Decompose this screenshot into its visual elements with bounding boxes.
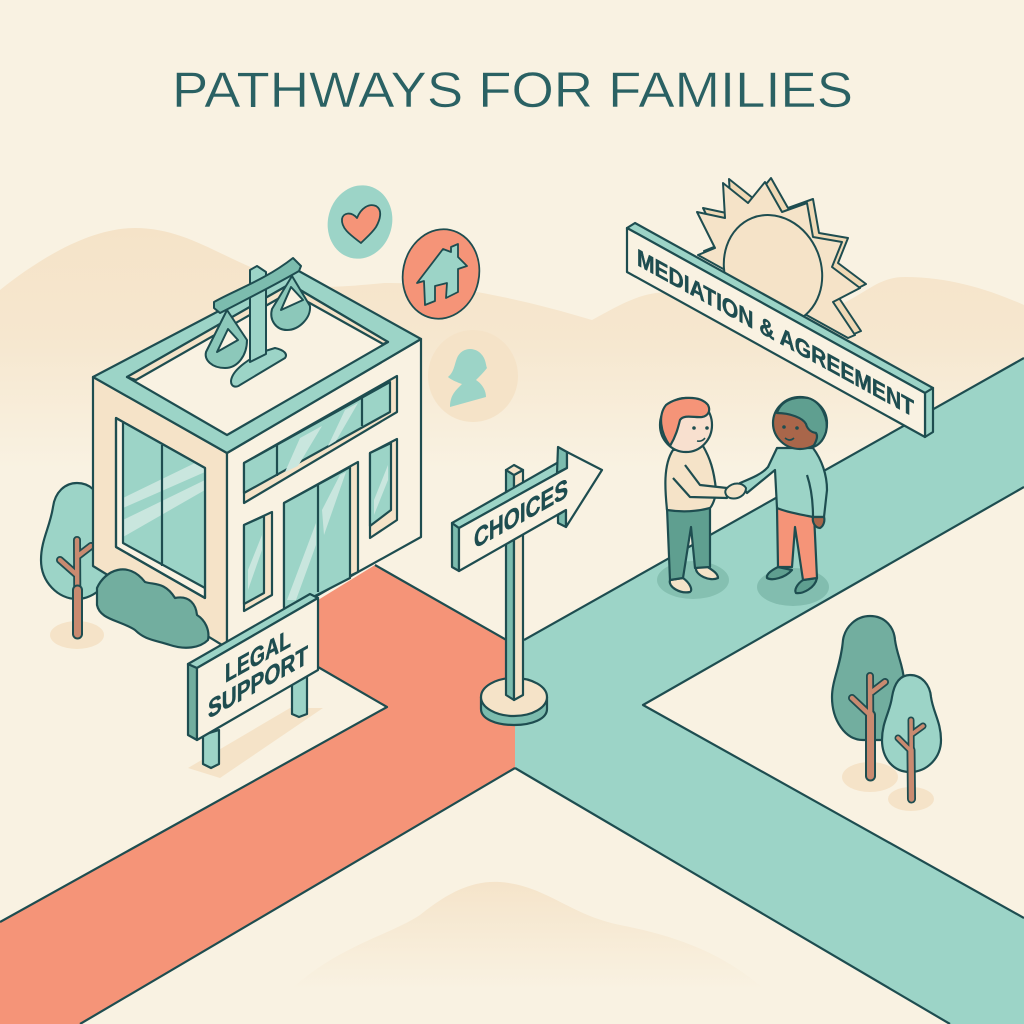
path: red legal route xyxy=(0,565,515,1024)
sign shadow xyxy=(188,708,323,778)
right window xyxy=(370,439,397,538)
roof parapet strip xyxy=(127,284,388,380)
roof interior xyxy=(127,284,388,435)
beam xyxy=(214,258,301,313)
right person pants xyxy=(777,508,817,580)
arrow board xyxy=(452,523,459,571)
roof rim xyxy=(93,270,421,453)
small tree xyxy=(882,675,941,772)
trees: right xyxy=(832,616,941,811)
right person torso xyxy=(740,448,827,517)
handshake xyxy=(725,484,746,498)
shrub xyxy=(97,569,208,648)
sign legs xyxy=(203,675,307,768)
sign text: SUPPORT xyxy=(208,640,308,725)
tree: left xyxy=(41,483,113,649)
entrance door xyxy=(284,462,358,612)
lower-left window xyxy=(244,512,272,611)
title: PATHWAYS FOR FAMILIES xyxy=(172,62,853,118)
floating icon: house xyxy=(394,222,488,326)
right pan xyxy=(271,276,310,330)
sign board xyxy=(188,664,197,740)
arrow text: CHOICES xyxy=(474,473,568,556)
left pan xyxy=(206,310,247,368)
person: right xyxy=(740,397,829,606)
path: teal mediation route xyxy=(515,358,1024,1024)
post xyxy=(506,470,514,700)
right person shoes xyxy=(767,567,817,593)
right person head xyxy=(773,397,827,449)
right person hanging hand xyxy=(813,517,824,528)
left person pants xyxy=(667,506,710,580)
signpost: choices xyxy=(452,447,602,725)
post xyxy=(250,266,266,362)
upper window xyxy=(244,376,397,503)
sign: legal support xyxy=(188,594,323,778)
person: left xyxy=(657,398,729,599)
building xyxy=(93,270,421,648)
post base xyxy=(481,697,547,725)
left person head xyxy=(660,398,712,452)
big tree xyxy=(832,616,904,740)
sign: mediation and agreement xyxy=(627,223,933,437)
banner text: MEDIATION & AGREEMENT xyxy=(637,244,914,423)
left person shoes xyxy=(670,565,718,592)
base xyxy=(231,348,286,387)
icon: scales of justice xyxy=(206,258,310,387)
sign text: LEGAL xyxy=(225,623,291,689)
left window xyxy=(116,418,205,598)
left person torso xyxy=(665,446,716,511)
icon: sun xyxy=(697,178,866,340)
background hills xyxy=(0,228,1024,990)
right wall xyxy=(227,339,421,648)
left wall xyxy=(93,377,227,648)
floating icon: heart xyxy=(320,178,400,266)
floating icon: person xyxy=(428,330,518,422)
